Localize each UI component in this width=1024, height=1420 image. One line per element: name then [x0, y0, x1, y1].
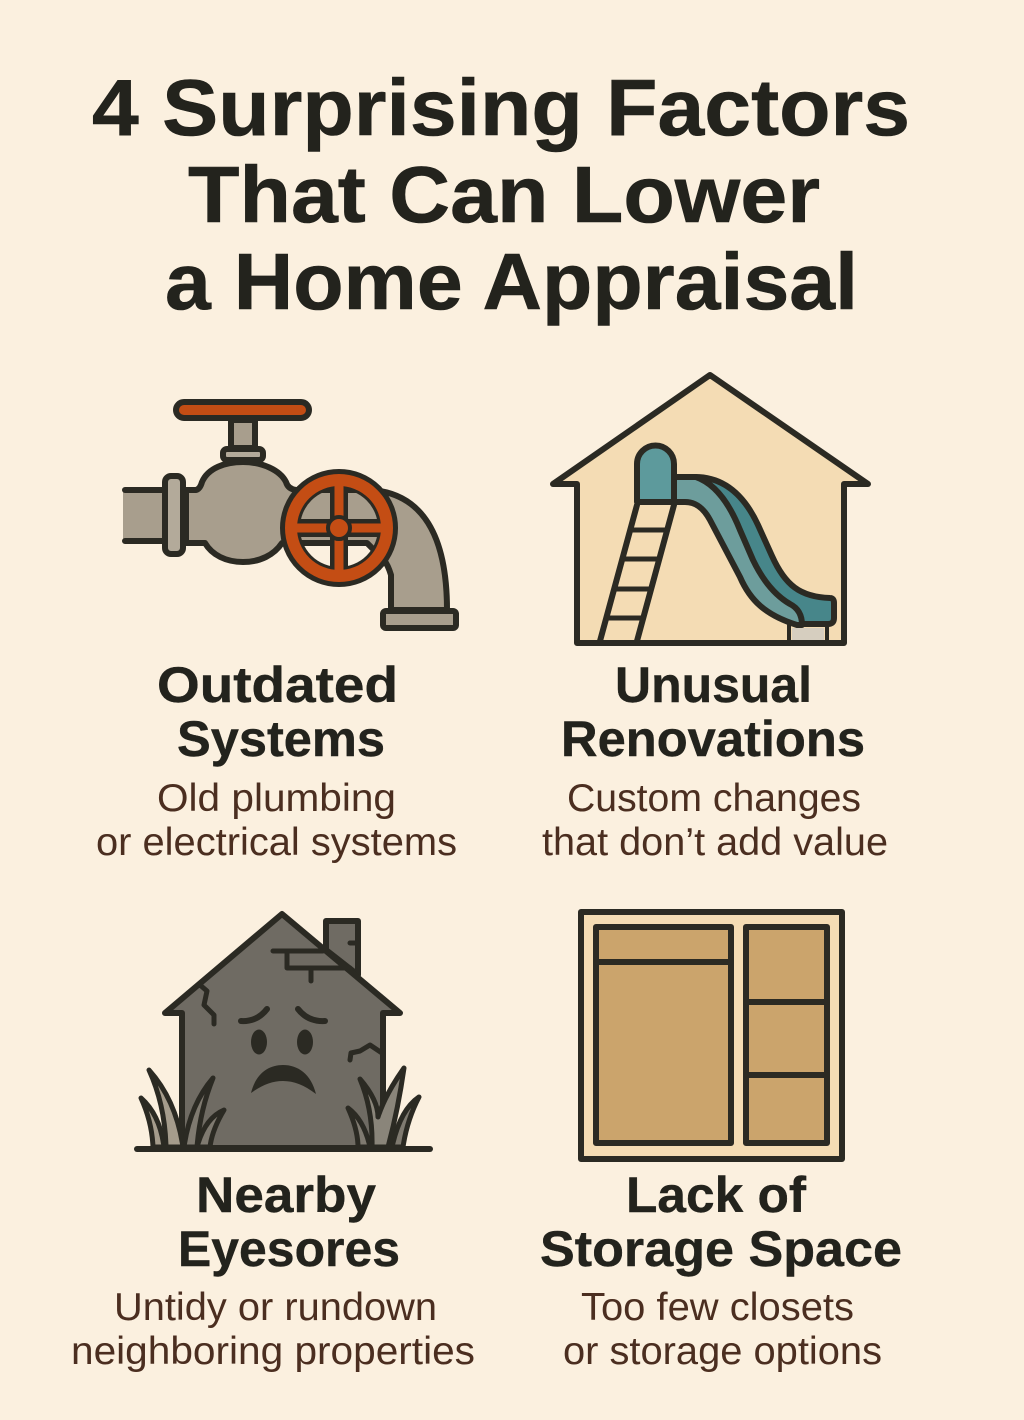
heading: nearby eyesores	[178, 1167, 400, 1277]
text: nearby eyesores description	[71, 1286, 475, 1373]
icon: house with slide	[553, 375, 868, 643]
grass right	[348, 1068, 419, 1147]
title: a Home Appraisal	[165, 237, 858, 326]
heading: lack of storage space: Storage Space	[540, 1221, 902, 1277]
heading: outdated systems: Systems	[177, 711, 385, 767]
panel: lack of storage space	[540, 912, 902, 1373]
icon: closet floor plan	[581, 912, 842, 1159]
text: unusual renovations description	[542, 777, 888, 864]
heading: unusual renovations: Renovations	[561, 711, 865, 767]
heading: outdated systems: Outdated	[157, 657, 398, 713]
text: unusual renovations description: that don’t add value	[542, 821, 888, 864]
panel: outdated systems	[96, 402, 457, 864]
heading: outdated systems	[157, 657, 398, 767]
panel: nearby eyesores	[71, 914, 475, 1373]
text: lack of storage space description	[563, 1286, 882, 1373]
text: outdated systems description: Old plumbing	[157, 777, 396, 820]
text: outdated systems description	[96, 777, 457, 864]
grass left	[141, 1070, 224, 1147]
wheel	[290, 479, 388, 577]
text: nearby eyesores description: neighboring properties	[71, 1330, 475, 1373]
icon: sad rundown house	[137, 914, 430, 1149]
title: 4 Surprising Factors	[92, 63, 910, 152]
heading: unusual renovations	[561, 657, 865, 767]
title	[92, 63, 910, 326]
icon: pipe valve	[123, 402, 456, 628]
heading: lack of storage space: Lack of	[626, 1167, 806, 1223]
text: unusual renovations description: Custom changes	[567, 777, 861, 820]
text: lack of storage space description: Too few closets	[581, 1286, 854, 1329]
sad face	[241, 1009, 325, 1094]
text: nearby eyesores description: Untidy or rundown	[114, 1286, 437, 1329]
panel: unusual renovations	[542, 375, 888, 864]
text: outdated systems description: or electrical systems	[96, 821, 457, 864]
heading: lack of storage space	[540, 1167, 902, 1277]
title: That Can Lower	[188, 150, 820, 239]
text: lack of storage space description: or storage options	[563, 1330, 882, 1373]
heading: unusual renovations: Unusual	[615, 657, 812, 713]
heading: nearby eyesores: Eyesores	[178, 1221, 400, 1277]
heading: nearby eyesores: Nearby	[196, 1167, 376, 1223]
